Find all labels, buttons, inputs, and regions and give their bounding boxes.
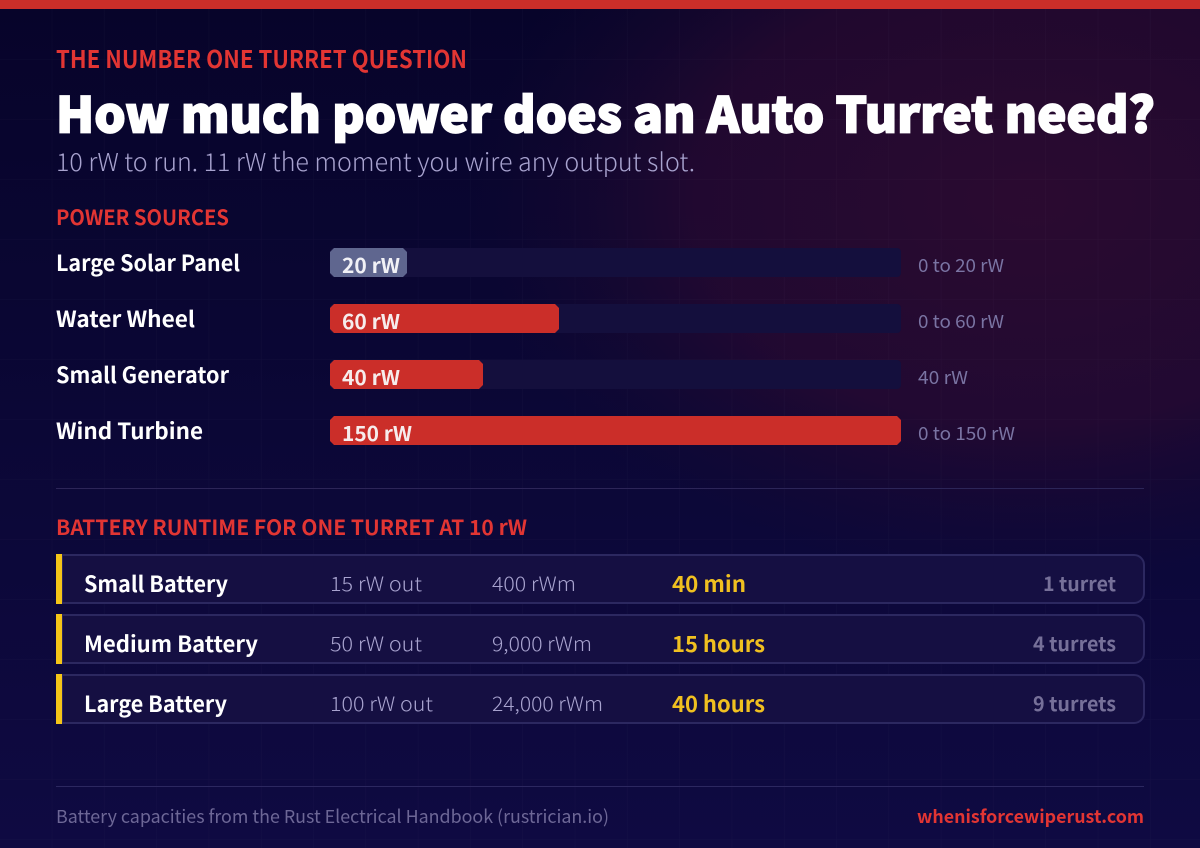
row: small generator: 40 rW <box>918 364 968 390</box>
row: large battery: Large Battery <box>84 687 227 719</box>
eyebrow: THE NUMBER ONE TURRET QUESTION <box>56 40 467 75</box>
title: How much power does an Auto Turret need? <box>56 76 1155 148</box>
row: large battery <box>56 674 1144 724</box>
row: large battery: 24,000 rWm <box>492 688 603 717</box>
panel: battery table <box>56 554 1144 724</box>
row: water wheel <box>56 302 1004 335</box>
row: medium battery: 4 turrets <box>1033 628 1116 657</box>
row: large solar panel <box>56 246 1004 279</box>
panel: power source bars <box>56 246 1015 447</box>
heading: battery runtime: BATTERY RUNTIME FOR ONE TURRET AT 10 rW <box>56 512 527 542</box>
row: small battery: Small Battery <box>84 567 228 599</box>
row: small battery: 40 min <box>672 567 746 599</box>
row: wind turbine: 0 to 150 rW <box>918 420 1015 446</box>
row: wind turbine: Wind Turbine <box>56 414 203 446</box>
row: medium battery: Medium Battery <box>84 627 258 659</box>
row: large solar panel: 0 to 20 rW <box>918 252 1004 278</box>
footer: source note: Battery capacities from the Rust Electrical Handbook (rustrician.io) <box>56 803 609 829</box>
row: large battery: 100 rW out <box>330 688 433 717</box>
row: small battery: 15 rW out <box>330 568 422 597</box>
row: medium battery: 9,000 rWm <box>492 628 592 657</box>
row: large solar panel: Large Solar Panel <box>56 246 240 278</box>
row: large battery: 9 turrets <box>1033 688 1116 717</box>
row: water wheel: 60 rW <box>342 305 400 335</box>
row: medium battery <box>56 614 1144 664</box>
row: wind turbine: 150 rW <box>342 417 412 447</box>
row: medium battery: 50 rW out <box>330 628 422 657</box>
footer: site url: whenisforcewiperust.com <box>917 803 1144 829</box>
row: small generator <box>56 358 968 391</box>
row: small generator: 40 rW <box>342 361 400 391</box>
subtitle: 10 rW to run. 11 rW the moment you wire any output slot. <box>56 143 695 179</box>
row: water wheel: Water Wheel <box>56 302 195 334</box>
row: large solar panel: 20 rW <box>342 249 400 279</box>
top accent bar <box>0 0 1200 9</box>
row: water wheel: 0 to 60 rW <box>918 308 1004 334</box>
row: wind turbine <box>56 414 1015 447</box>
row: small battery <box>56 554 1144 604</box>
row: medium battery: 15 hours <box>672 627 765 659</box>
heading: power sources: POWER SOURCES <box>56 202 229 232</box>
row: small generator: Small Generator <box>56 358 229 390</box>
row: large battery: 40 hours <box>672 687 765 719</box>
row: small battery: 400 rWm <box>492 568 576 597</box>
row: small battery: 1 turret <box>1043 568 1117 597</box>
